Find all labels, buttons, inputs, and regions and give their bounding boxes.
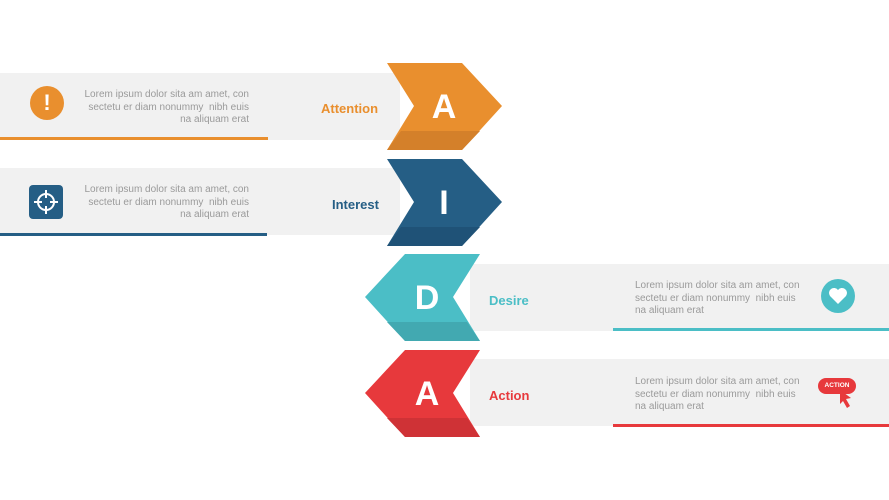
- text: attention: na aliquam erat: [180, 114, 249, 125]
- text: desire: na aliquam erat: [635, 305, 704, 316]
- label: desire: Desire: [489, 293, 529, 308]
- panel: desire: [470, 264, 889, 331]
- text: action: Lorem ipsum dolor sita am amet, con: [635, 376, 800, 387]
- label: interest: Interest: [332, 197, 379, 212]
- text: interest: Lorem ipsum dolor sita am amet, con: [84, 184, 249, 195]
- icon: action button: [818, 378, 856, 408]
- panel: attention: [0, 73, 400, 140]
- text: desire: [635, 280, 800, 316]
- icon: heart: [821, 279, 855, 313]
- text: action: na aliquam erat: [635, 401, 704, 412]
- icon: exclamation: [30, 86, 64, 120]
- text: desire: sectetu er diam nonummy nibh euis: [635, 292, 796, 304]
- panel: interest: [0, 168, 400, 236]
- text: interest: [84, 184, 249, 220]
- text: interest: na aliquam erat: [180, 209, 249, 220]
- text: action: [635, 376, 800, 412]
- text: action: sectetu er diam nonummy nibh euis: [635, 388, 796, 400]
- label: attention: Attention: [321, 101, 378, 116]
- icon: target: [29, 185, 63, 219]
- icon: exclamation: !: [43, 90, 51, 115]
- chevron: A action: A: [415, 375, 439, 413]
- chevron: I interest: I: [439, 184, 449, 222]
- text: interest: sectetu er diam nonummy nibh euis: [88, 196, 249, 208]
- text: attention: sectetu er diam nonummy nibh euis: [88, 102, 249, 112]
- text: desire: Lorem ipsum dolor sita am amet, con: [635, 280, 800, 291]
- chevron: D desire: D: [415, 279, 439, 317]
- text: attention: Lorem ipsum dolor sita am amet, con: [84, 89, 249, 100]
- text: attention: [84, 89, 249, 125]
- label: action: Action: [489, 388, 529, 403]
- chevron: A attention: A: [432, 88, 456, 126]
- panel: action: [470, 359, 889, 427]
- icon: action button: ACTION: [825, 382, 849, 389]
